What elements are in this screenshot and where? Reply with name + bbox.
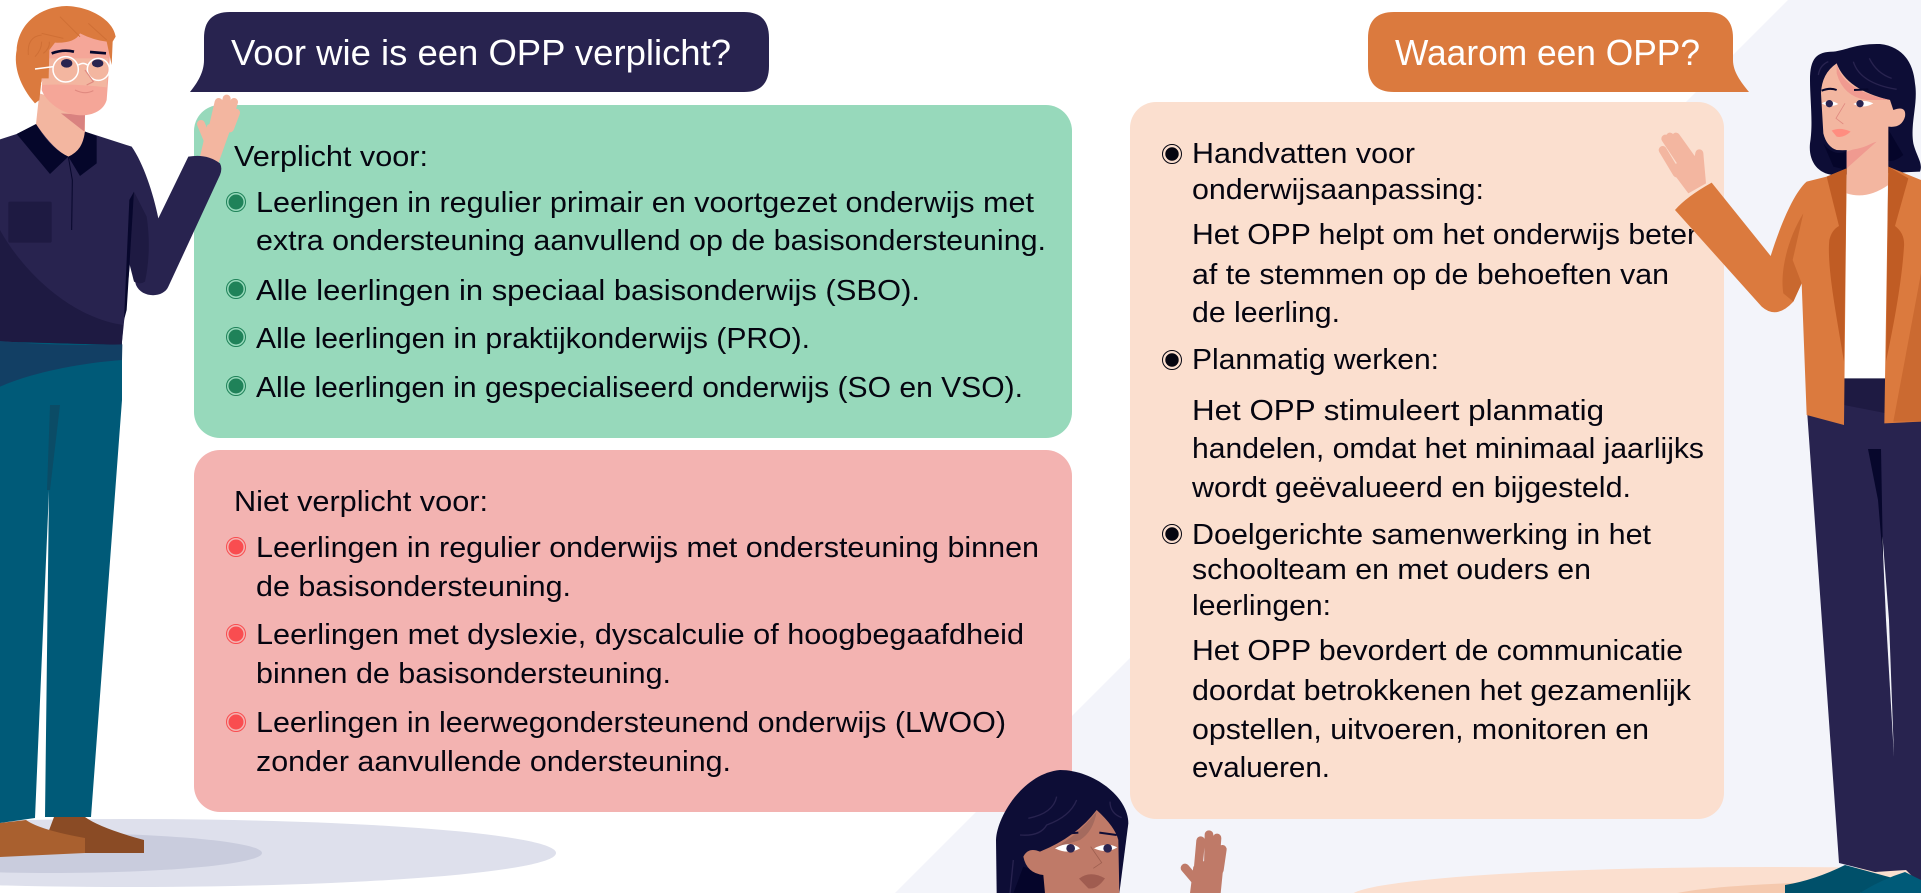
reason 3: leerlingen: [1192, 590, 1331, 622]
reason 3 [1192, 519, 1692, 784]
woman legs [1807, 410, 1921, 885]
bubble heading left: Voor wie is een OPP verplicht? [231, 32, 731, 73]
man shoes [0, 817, 144, 857]
woman neck [1847, 123, 1888, 195]
bottom woman eyes [1055, 844, 1117, 852]
illustration: man with glasses [0, 6, 237, 857]
woman eyes [1822, 101, 1873, 107]
bottom woman face [1023, 810, 1119, 893]
red bullet list: Leerlingen met dyslexie, dyscalculie of hoogbegaafdheid [256, 619, 1024, 651]
man hand [200, 99, 237, 163]
man torso [0, 124, 221, 345]
red bullet list: de basisondersteuning. [256, 571, 571, 603]
woman face [1821, 63, 1905, 150]
red bullet list: binnen de basisondersteuning. [256, 658, 671, 690]
man pocket [8, 202, 52, 243]
bottom woman hand [1185, 835, 1225, 893]
man placket [68, 157, 72, 230]
man ear and face [29, 70, 43, 85]
man torso shade [0, 230, 123, 345]
reason 2: Het OPP stimuleert planmatig [1192, 395, 1604, 427]
woman lapels [1827, 168, 1847, 362]
woman hand [1663, 137, 1706, 193]
reason 3: Het OPP bevordert de communicatie [1192, 635, 1683, 667]
reason 3: evalueren. [1192, 752, 1330, 784]
speech bubble: Waarom een OPP? [1368, 12, 1749, 92]
woman hair [1810, 44, 1921, 175]
man nose and mouth [75, 70, 93, 93]
woman blazer [1675, 168, 1847, 425]
red bullet list: Leerlingen in regulier onderwijs met ondersteuning binnen [256, 532, 1039, 564]
man pants band [0, 341, 122, 387]
green bullet list: Leerlingen in regulier primair en voortgezet onderwijs met [256, 187, 1034, 219]
man legs [0, 342, 122, 823]
man eyebrows and eyes [52, 51, 106, 53]
woman nose and lips [1836, 103, 1845, 124]
woman shoes [1785, 865, 1921, 893]
red bullet list: Leerlingen in leerwegondersteunend onderwijs (LWOO) [256, 707, 1006, 739]
reason bullets [1162, 144, 1182, 544]
panel: niet verplicht voor [194, 450, 1072, 812]
woman pants top [1844, 378, 1886, 427]
reason 3: schoolteam en met ouders en [1192, 554, 1591, 586]
reason 1: Handvatten voor [1192, 138, 1416, 170]
green bullet list: Alle leerlingen in gespecialiseerd onderwijs (SO en VSO). [256, 372, 1023, 404]
reason 1: af te stemmen op de behoeften van [1192, 259, 1669, 291]
reason 2: wordt geëvalueerd en bijgesteld. [1191, 472, 1631, 504]
reason 1: de leerling. [1192, 297, 1340, 329]
reason 3: opstellen, uitvoeren, monitoren en [1192, 714, 1649, 746]
green bullet list [226, 187, 1046, 404]
green bullet list: Alle leerlingen in speciaal basisonderwijs (SBO). [256, 275, 920, 307]
reason 2 [1191, 344, 1704, 504]
red panel heading: Niet verplicht voor: [234, 486, 488, 518]
man arm shade [129, 192, 149, 283]
bottom woman nose and lips [1091, 847, 1102, 868]
woman blazer shade [1782, 213, 1803, 302]
green bullet list: Alle leerlingen in praktijkonderwijs (PRO). [256, 323, 810, 355]
man glasses [35, 57, 109, 82]
illustration: woman at the bottom [996, 770, 1225, 893]
man hair [16, 6, 116, 103]
bubble heading right: Waarom een OPP? [1395, 32, 1700, 73]
panel: verplicht voor [194, 105, 1072, 438]
red bullet list: zonder aanvullende ondersteuning. [256, 746, 731, 778]
background diagonal shape [895, 0, 1921, 893]
man neck [36, 93, 85, 157]
man collar [17, 124, 97, 176]
red bullet list [226, 532, 1039, 778]
reason 1: onderwijsaanpassing: [1192, 174, 1484, 206]
panel: waarom een OPP [1130, 102, 1724, 819]
green bullet list: extra ondersteuning aanvullend op de basisondersteuning. [256, 225, 1046, 257]
reason 1 [1192, 138, 1698, 329]
floor shadow right [1350, 867, 1921, 893]
speech bubble: Voor wie is een OPP verplicht? [190, 12, 769, 92]
reason 1: Het OPP helpt om het onderwijs beter [1192, 219, 1698, 251]
reason 3: Doelgerichte samenwerking in het [1192, 519, 1651, 551]
floor shadow left [0, 819, 556, 887]
reason 2: Planmatig werken: [1192, 344, 1439, 376]
green panel heading: Verplicht voor: [234, 141, 428, 173]
illustration: woman in orange blazer [1663, 44, 1921, 893]
bottom woman hair strands [1010, 797, 1122, 893]
woman shirt [1844, 185, 1887, 380]
bottom woman hair [996, 770, 1128, 893]
reason 3: doordat betrokkenen het gezamenlijk [1192, 675, 1692, 707]
reason 2: handelen, omdat het minimaal jaarlijks [1192, 433, 1704, 465]
